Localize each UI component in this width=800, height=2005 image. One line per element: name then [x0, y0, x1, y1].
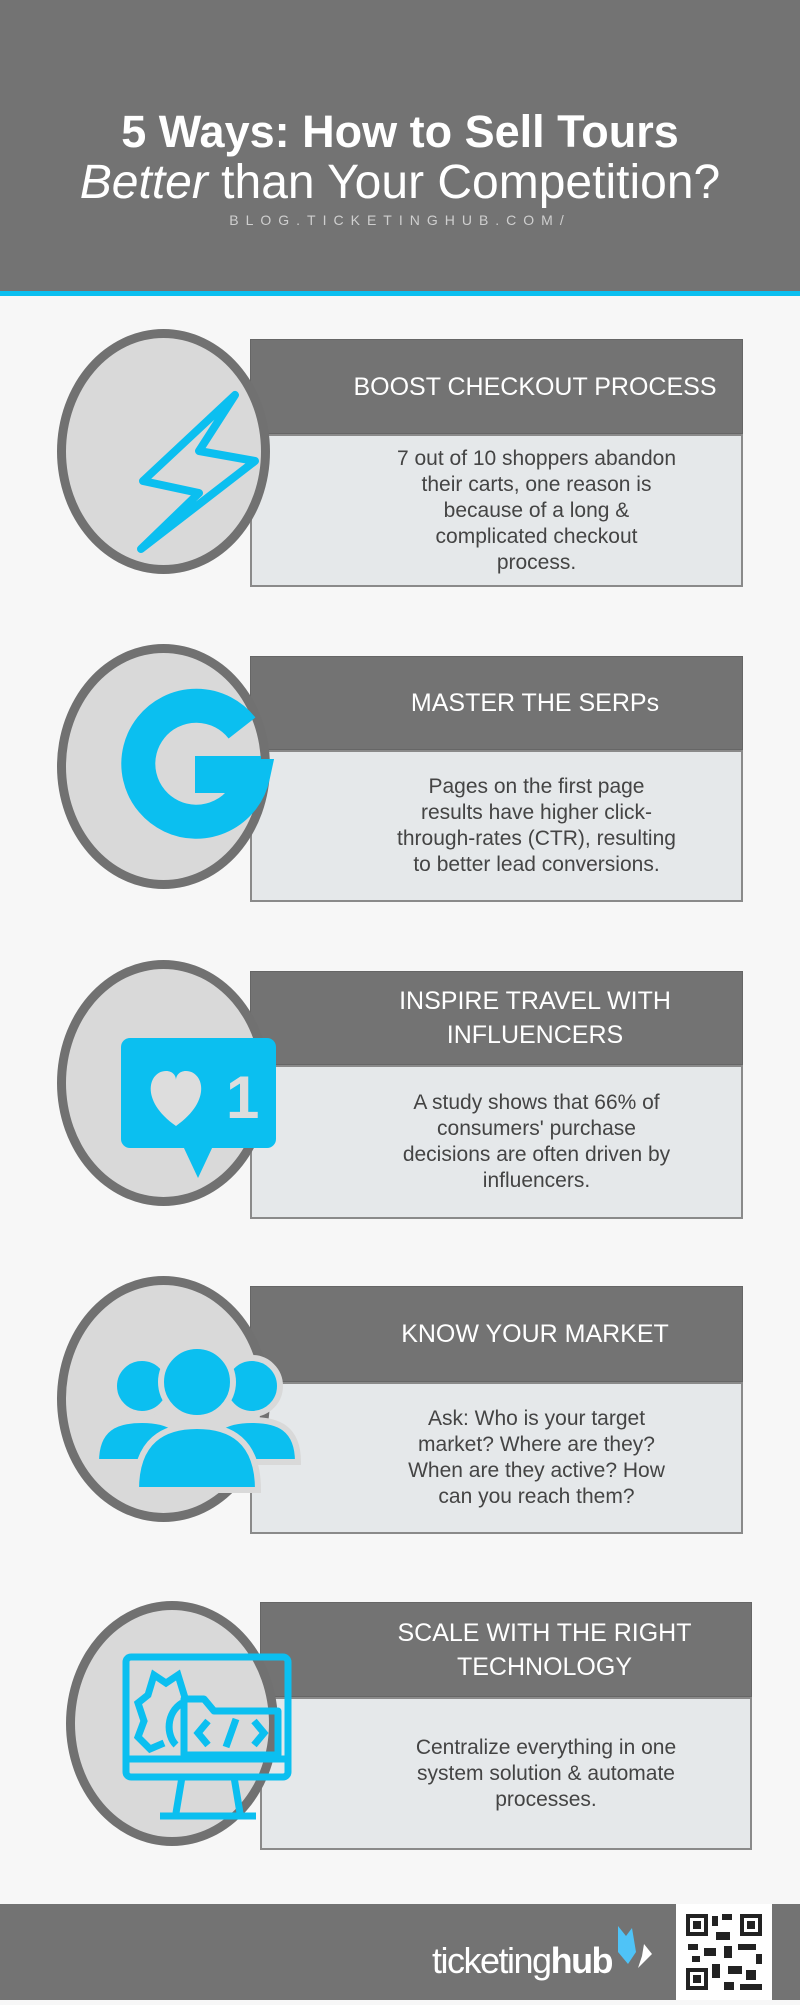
body text: consumers' purchase [437, 1117, 636, 1140]
heading band [250, 1286, 743, 1382]
heading band [250, 971, 743, 1065]
heading band: BOOST CHECKOUT PROCESS [353, 372, 717, 400]
body text: through-rates (CTR), resulting [397, 827, 676, 850]
icon: people [99, 1349, 301, 1493]
body text [250, 434, 743, 587]
icon: logo mark [618, 1926, 652, 1968]
title line 2: Better than Your Competition? [80, 156, 720, 209]
url: BLOG.TICKETINGHUB.COM/ [229, 212, 571, 228]
panel: technology [66, 1601, 752, 1850]
icon: monitor [122, 1654, 292, 1820]
body text [250, 750, 743, 902]
logo text: ticketinghub [432, 1940, 612, 1981]
body text: their carts, one reason is [422, 472, 651, 496]
body text: can you reach them? [438, 1485, 635, 1508]
body text: When are they active? How [408, 1459, 665, 1482]
icon circle [57, 644, 270, 889]
body text [250, 1065, 743, 1219]
body text: system solution & automate [417, 1762, 675, 1784]
qr code [676, 1904, 772, 2000]
body text: influencers. [483, 1169, 590, 1192]
heading band: INFLUENCERS [447, 1021, 623, 1049]
icon circle [57, 329, 270, 574]
body text: decisions are often driven by [403, 1143, 670, 1166]
body text: because of a long & [444, 498, 629, 522]
body text: 7 out of 10 shoppers abandon [397, 446, 676, 470]
body text: complicated checkout [436, 524, 637, 548]
heading band [260, 1602, 752, 1697]
title line 1: 5 Ways: How to Sell Tours [121, 106, 679, 157]
heading band: TECHNOLOGY [457, 1652, 632, 1680]
panel: serps [57, 644, 743, 902]
heading band [250, 339, 743, 434]
panel: know market [57, 1276, 743, 1534]
body text: A study shows that 66% of [413, 1091, 660, 1114]
heading band: INSPIRE TRAVEL WITH [399, 987, 671, 1015]
icon: lightning [137, 390, 259, 553]
body text: processes. [495, 1788, 597, 1810]
icon circle [57, 960, 270, 1206]
body text [260, 1697, 752, 1850]
body text [250, 1382, 743, 1534]
body text: Ask: Who is your target [428, 1407, 645, 1430]
header [0, 0, 800, 291]
body text: Pages on the first page [428, 775, 644, 798]
panel: influencers [57, 960, 743, 1219]
icon circle [66, 1601, 278, 1846]
footer [0, 1904, 800, 2000]
body text: Centralize everything in one [416, 1736, 676, 1758]
icon: G [121, 688, 274, 839]
icon circle [57, 1276, 270, 1522]
heading band: MASTER THE SERPs [411, 689, 659, 717]
panel: boost checkout [57, 329, 743, 587]
heading band: KNOW YOUR MARKET [401, 1320, 669, 1348]
body text: results have higher click- [421, 801, 652, 824]
body text: to better lead conversions. [413, 853, 660, 876]
body text: market? Where are they? [418, 1433, 655, 1456]
icon: like notification: 1 [226, 1064, 259, 1131]
heading band [250, 656, 743, 750]
heading band: SCALE WITH THE RIGHT [397, 1618, 692, 1646]
body text: process. [497, 550, 576, 574]
icon: like notification [121, 1038, 276, 1178]
